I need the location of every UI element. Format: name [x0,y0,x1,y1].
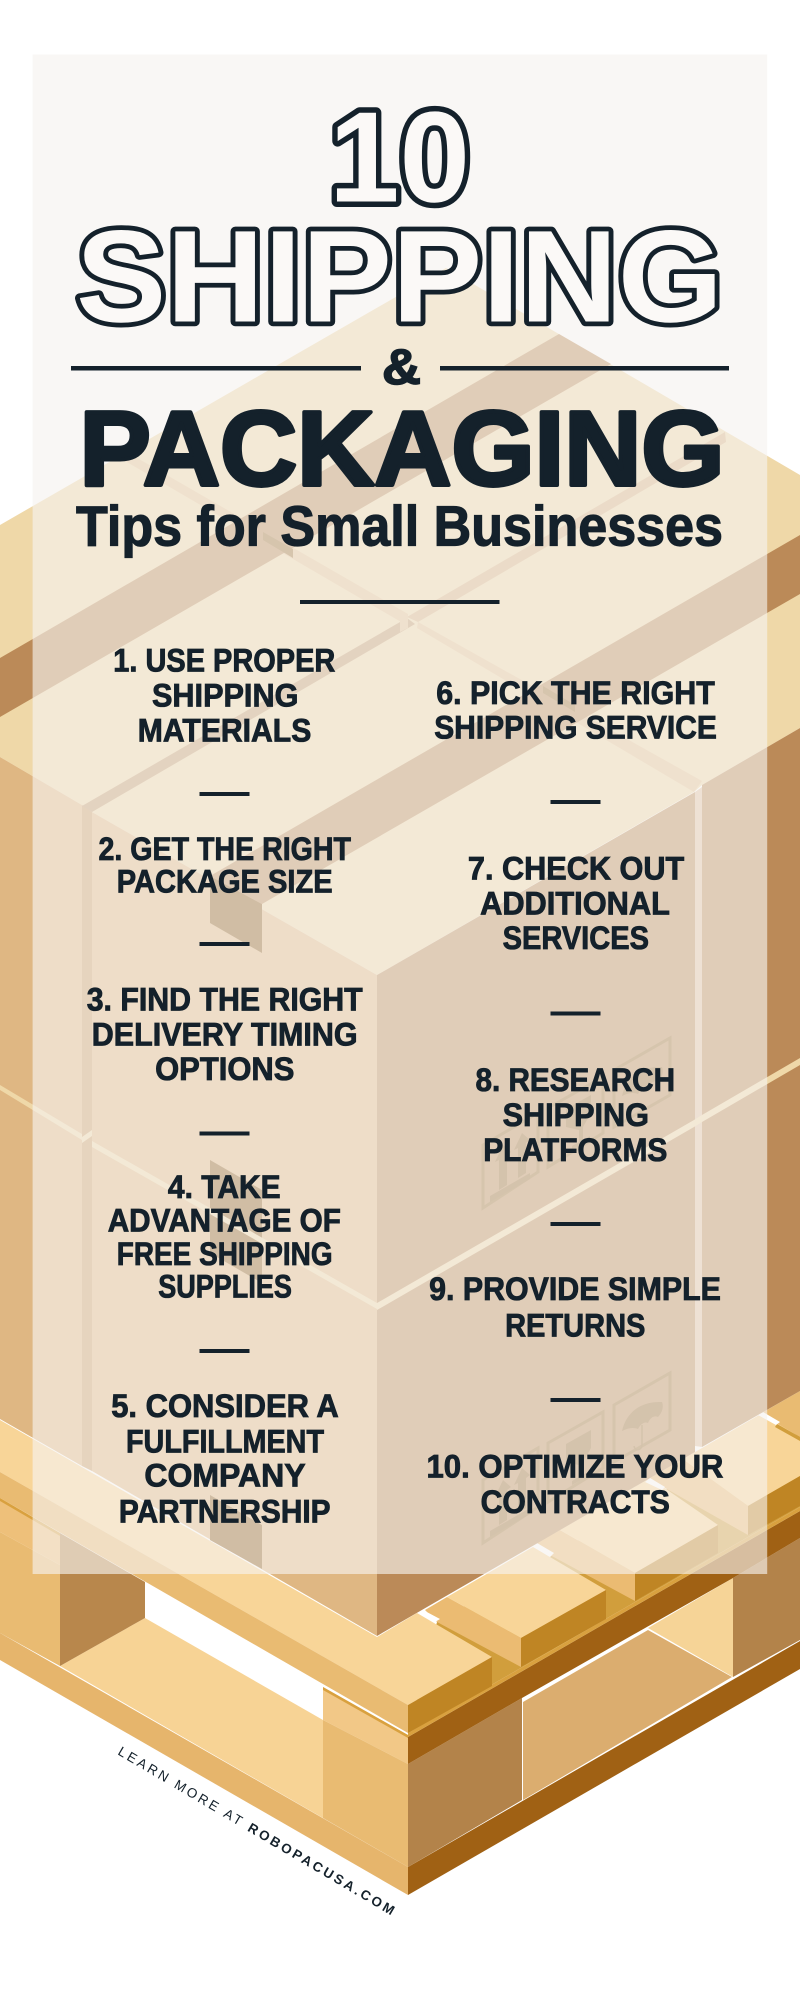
tips: right column [426,675,723,1520]
tip 1: 1. USE PROPER [113,642,335,678]
tips: left column: PACKAGE SIZE [117,864,333,900]
tip 3: 3. FIND THE RIGHT [87,982,363,1018]
tips: right column: SHIPPING SERVICE [434,709,717,745]
box tape, upper [0,334,611,717]
tip 5: 5. CONSIDER A [111,1388,339,1424]
title divider with ampersand [71,339,729,395]
tips: right column: CONTRACTS [481,1484,670,1520]
icons: handling marks, upper box [483,1038,670,1208]
tips: left column: COMPANY [144,1458,306,1494]
tips: left column: DELIVERY TIMING [92,1016,358,1052]
tips: right column: PLATFORMS [483,1132,667,1168]
tip 4: 4. TAKE [168,1169,281,1205]
icon: fragile glass [566,1430,591,1485]
title: SHIPPING: SHIPPING [76,202,723,350]
tips: left column [87,642,363,1530]
tip 2: 2. GET THE RIGHT [98,831,351,867]
box top seams [82,432,726,812]
title: SHIPPING: SHIPPING [76,202,723,350]
pallet deck board 4 [650,1391,800,1535]
icons: handling marks, lower box [483,1373,670,1543]
seams between box tiers [0,1058,800,1310]
box tape, lower [210,535,800,904]
pallet deck board 2 [425,1547,606,1667]
tips: left column: OPTIONS [155,1051,294,1087]
title: 10: 10 [329,86,470,230]
tips: left column: SUPPLIES [158,1268,292,1304]
footer: source link: LEARN MORE AT ROBOPACUSA.COM [115,1744,399,1919]
illustration: stacked cardboard boxes [0,268,800,1636]
tips: left column: SHIPPING [152,677,298,713]
tips: right column: RETURNS [505,1308,645,1344]
tip 9: 9. PROVIDE SIMPLE [429,1271,721,1307]
tips: left column: PARTNERSHIP [119,1494,331,1530]
pallet deck board 1 [0,1420,492,1733]
tips: right column: ADDITIONAL [480,886,670,922]
tape folds on box side [210,532,575,1569]
tip 6: 6. PICK THE RIGHT [436,675,715,711]
icon: this way up arrows [490,1468,530,1537]
pallet deck board 3 [533,1478,718,1601]
title: PACKAGING: PACKAGING [80,390,724,508]
tips: left column: FREE SHIPPING [117,1236,333,1272]
illustration: wooden pallet [0,1391,800,1895]
tip 8: 8. RESEARCH [476,1062,675,1098]
tips: right column: SHIPPING [503,1097,649,1133]
tips: left column: MATERIALS [138,712,311,748]
icon: umbrella [622,1402,663,1450]
title divider with ampersand: & [382,339,421,395]
divider [300,600,500,604]
panel: translucent content backdrop [33,54,767,1574]
tips: left column: ADVANTAGE OF [108,1203,341,1239]
title: 10: 10 [329,86,470,230]
tip 7: 7. CHECK OUT [468,850,685,886]
tips: left column: FULFILLMENT [126,1424,324,1460]
subtitle: Tips for Small Businesses [76,494,723,558]
tips: right column: SERVICES [503,920,649,956]
tip 10: 10. OPTIMIZE YOUR [426,1449,723,1485]
